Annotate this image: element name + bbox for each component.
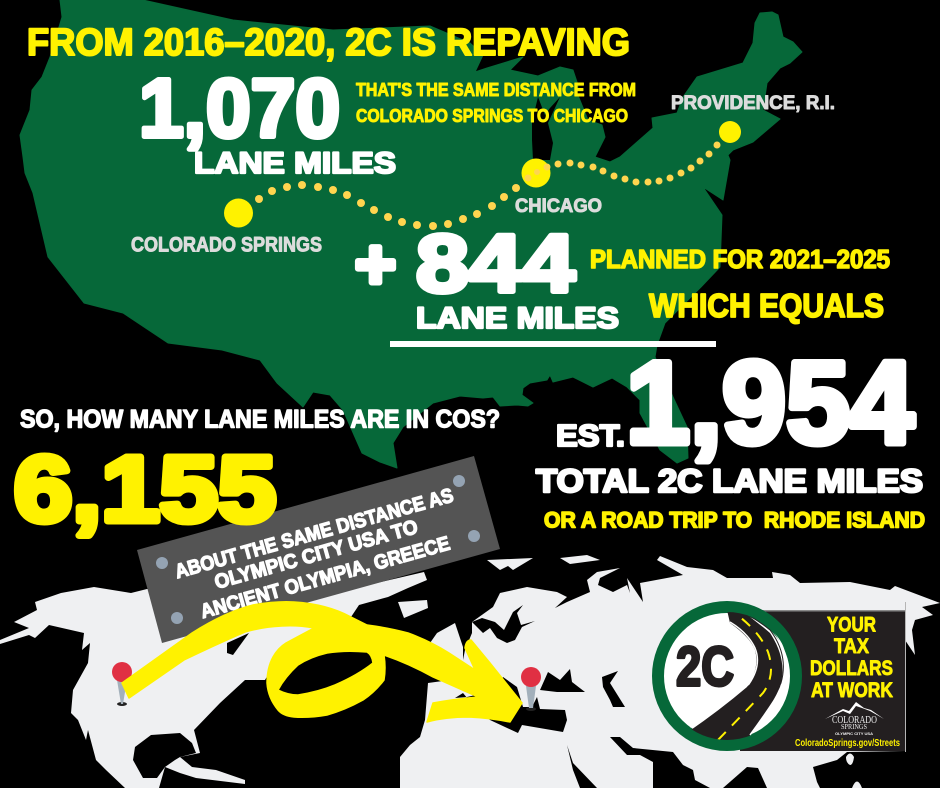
logo text: your tax dollars at work: AT WORK	[811, 679, 893, 702]
badge: road circle	[658, 607, 796, 745]
stat: plus sign: +	[355, 225, 396, 303]
label: Colorado Springs: COLORADO SPRINGS	[131, 234, 322, 256]
sea: Baltic	[472, 605, 535, 643]
sea: Caspian	[602, 671, 625, 707]
label: Chicago: CHICAGO	[515, 195, 602, 217]
plate: distance comparison sign	[137, 456, 500, 643]
map: continental United States	[20, 0, 802, 468]
logo text: your tax dollars at work: DOLLARS	[810, 657, 893, 680]
stat: 1,954: 1,954	[626, 337, 914, 468]
logo text: your tax dollars at work: TAX	[834, 635, 869, 658]
sea: Gulf of Mexico	[133, 733, 196, 778]
bolts	[156, 475, 480, 624]
caption: same distance: THAT'S THE SAME DISTANCE FROM	[356, 80, 636, 100]
pin: Ancient Olympia	[521, 667, 541, 711]
label: Providence: PROVIDENCE, R.I.	[671, 92, 835, 114]
caption: same distance	[356, 80, 636, 126]
marker: Colorado Springs	[224, 198, 253, 228]
sea: Bay of Bengal	[723, 767, 767, 788]
plate text: ANCIENT OLYMPIA, GREECE	[198, 533, 452, 623]
caption: road trip: OR A ROAD TRIP TO RHODE ISLAND	[544, 508, 925, 532]
label: est.: EST.	[556, 418, 625, 453]
stat: 1,070: 1,070	[139, 62, 340, 154]
marker: Chicago	[522, 158, 550, 188]
badge: 2C: 2C	[676, 634, 734, 698]
label: lane miles: LANE MILES	[194, 147, 396, 180]
route: dots Chicago to Providence	[524, 142, 720, 186]
logo text: your tax dollars at work: YOUR	[827, 614, 876, 636]
sea: Mediterranean	[455, 677, 567, 733]
caption: planned: PLANNED FOR 2021–2025	[590, 244, 890, 274]
logo: City of Colorado Springs: OLYMPIC CITY USA	[835, 731, 873, 736]
logo: City of Colorado Springs	[825, 702, 884, 736]
caption: which equals: WHICH EQUALS	[649, 287, 884, 324]
plate text: OLYMPIC CITY USA TO	[212, 516, 420, 594]
island: Great Britain	[430, 623, 463, 665]
plate text	[173, 485, 456, 623]
logo: City of Colorado Springs: COLORADO	[832, 715, 877, 726]
route: dotted road trip path	[255, 181, 520, 230]
label: lane miles: LANE MILES	[416, 302, 619, 335]
lake: Lake Michigan	[532, 97, 560, 160]
question: SO, HOW MANY LANE MILES ARE IN COS?	[20, 406, 500, 434]
caption: same distance: COLORADO SPRINGS TO CHICAGO	[356, 106, 628, 126]
landmass: North America and Greenland	[0, 572, 427, 788]
islands: Japan and Philippines	[846, 754, 862, 788]
sea: Red Sea	[567, 745, 597, 788]
logo: City of Colorado Springs: SPRINGS	[841, 723, 867, 731]
stat: 844: 844	[416, 218, 575, 310]
arrow: route to Greece	[122, 602, 522, 722]
marker: Providence	[719, 121, 741, 143]
sea: Hudson Bay	[227, 633, 249, 655]
logo: 2C your tax dollars at work	[658, 602, 906, 752]
label: total 2C lane miles: TOTAL 2C LANE MILES	[536, 463, 923, 499]
landmass: Eurasia and Africa	[400, 556, 940, 788]
sea: Black Sea	[540, 669, 585, 692]
logo url: ColoradoSprings.gov/Streets	[795, 737, 900, 749]
sum rule	[390, 341, 716, 347]
plate text: ABOUT THE SAME DISTANCE AS	[173, 485, 456, 583]
pin: Colorado Springs	[112, 662, 132, 706]
title: FROM 2016–2020, 2C IS REPAVING	[27, 22, 630, 64]
map: world landmasses	[0, 555, 940, 788]
logo text: your tax dollars at work	[810, 614, 893, 702]
sea: Persian Gulf and Arabian Sea	[610, 737, 710, 788]
island: Iceland	[398, 600, 428, 618]
islands: Arctic	[487, 555, 600, 570]
stat: 6,155: 6,155	[14, 437, 276, 541]
